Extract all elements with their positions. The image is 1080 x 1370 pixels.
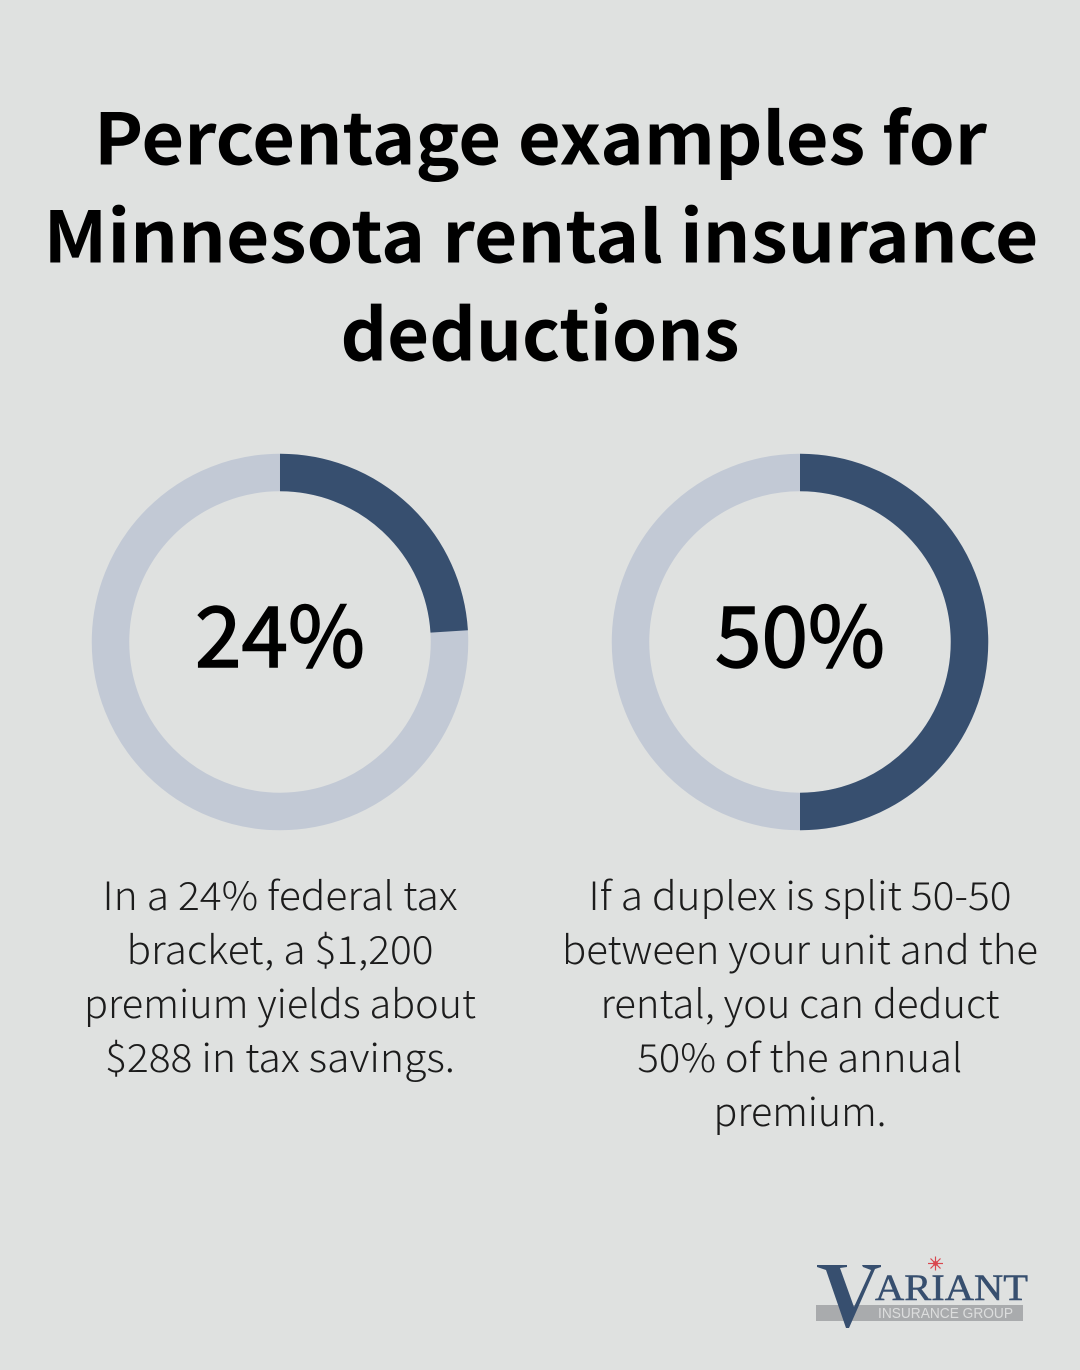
- text block: 24% example: $288 in tax savings.: [105, 1028, 455, 1084]
- title: Minnesota rental insurance: [44, 182, 1038, 284]
- logo: Variant Insurance Group: [816, 1256, 1028, 1328]
- text block: 24% example: In a 24% federal tax: [102, 866, 458, 922]
- text block: 50% example: premium.: [714, 1082, 886, 1138]
- text block: 24% example: [84, 866, 476, 1084]
- text block: 24% example: premium yields about: [84, 974, 476, 1030]
- title: deductions: [340, 280, 740, 382]
- donut chart: 24%: 24%: [195, 571, 365, 692]
- text block: 50% example: between your unit and the: [562, 920, 1038, 976]
- text block: 50% example: rental, you can deduct: [600, 974, 1000, 1030]
- text block: 50% example: [562, 866, 1038, 1138]
- logo: Variant Insurance Group: ARIANT: [875, 1268, 1028, 1309]
- donut chart: 50%: 50%: [715, 571, 885, 692]
- title: Percentage examples for: [94, 84, 988, 186]
- donut chart: 24%: [110, 472, 450, 812]
- text block: 50% example: 50% of the annual: [638, 1028, 962, 1084]
- text block: 50% example: If a duplex is split 50-50: [588, 866, 1012, 922]
- logo: Variant Insurance Group: INSURANCE GROUP: [878, 1306, 1013, 1322]
- title: [44, 84, 1038, 382]
- donut chart: 50%: [630, 472, 970, 812]
- text block: 24% example: bracket, a $1,200: [126, 920, 434, 976]
